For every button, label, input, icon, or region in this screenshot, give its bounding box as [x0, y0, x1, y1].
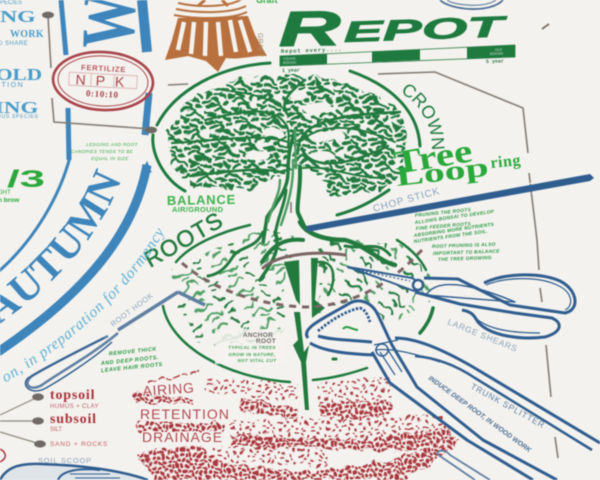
soil items with pins: subsoil	[50, 412, 97, 427]
soil items with pins: HUMUS + CLAY	[50, 404, 99, 410]
anchor root note	[215, 329, 287, 364]
root pruning note	[412, 207, 500, 263]
root pruning note: NUTRIENTS FROM THE SOIL.	[413, 229, 488, 245]
soil items with pins: SILT	[50, 427, 63, 433]
root pruning note: FINE FEEDER ROOTS	[416, 221, 472, 232]
tree: branches and trunk	[172, 80, 400, 243]
repot bar: young to old bonsai: Repot every....	[281, 46, 343, 55]
canopy note: EQUAL IN SIZE	[91, 156, 129, 161]
large shears	[348, 267, 575, 354]
root pruning note: IMPORTANT TO BALANCE	[433, 249, 500, 257]
balance label: BALANCE	[167, 192, 236, 208]
roots ring	[163, 225, 433, 382]
root pruning note: ALLOWS BONSAI TO DEVELOP	[413, 209, 495, 226]
crown ring	[153, 63, 420, 215]
label: crown: CROWN	[402, 84, 446, 150]
canopy note: LEDGING AND ROOT	[86, 142, 139, 147]
autumn subtitle: on, in preparation for dormancy	[3, 228, 165, 382]
soil function labels: RETENTION	[140, 406, 230, 422]
fertilize NPK seal: FERTILIZE	[81, 63, 126, 74]
green detail between tools	[343, 327, 358, 330]
left column: blue labels: WORK	[10, 29, 44, 40]
soil speckle bands	[133, 372, 460, 480]
soil function labels	[140, 379, 230, 445]
anchor root note: GROW IN NATURE,	[228, 352, 276, 357]
tree loop ring title: ring	[490, 152, 522, 172]
green ratio note	[0, 165, 45, 204]
anchor root note: TYPICAL IN TREES	[228, 345, 276, 350]
fertilize NPK seal	[52, 49, 154, 113]
repot bar: young to old bonsai: YOUNG	[283, 57, 296, 61]
anchor root note: ANCHOR	[243, 332, 273, 339]
soil scoop	[0, 456, 148, 480]
large shears: LARGE SHEARS	[446, 317, 519, 354]
pruning line: dashed cut	[182, 250, 422, 307]
repot bar: young to old bonsai: OLD	[495, 48, 503, 52]
tree: foliage	[167, 73, 407, 197]
anchor root note: NOT VITAL CUT	[237, 358, 277, 363]
hook note: AND DEEP ROOTS.	[100, 355, 159, 367]
repot logo: EPOT	[343, 10, 508, 48]
chop stick: CHOP STICK	[372, 186, 441, 215]
hook note	[100, 346, 163, 374]
root hook tool	[25, 291, 205, 391]
repot logo: R	[278, 1, 341, 57]
root hook tool: ROOT HOOK	[109, 291, 155, 329]
broom: grafted root bundle	[165, 0, 278, 72]
gray leader pins	[42, 12, 558, 458]
soil function labels: AIRING	[142, 379, 195, 399]
repot logo	[278, 1, 508, 57]
trunk splitter	[306, 301, 600, 480]
tree loop ring title	[391, 133, 522, 192]
root pruning note: ROOT PRUNING IS ALSO	[432, 242, 496, 250]
left column: blue labels	[0, 0, 44, 120]
root pruning note: THE TREE GROWING	[438, 255, 492, 263]
top stamp fragment	[440, 0, 503, 9]
green ratio note: /3	[7, 165, 45, 192]
trunk splitter: INDUCE DEEP ROOT, IN WOOD WORK	[427, 375, 533, 455]
fertilize NPK seal: 0:10:10	[86, 88, 119, 100]
label: roots: ROOTS	[140, 206, 228, 272]
canopy note: CANOPIES TENDS TO BE	[71, 149, 134, 154]
repot bar: young to old bonsai: BONSAI	[283, 61, 296, 65]
soil function labels: DRAINAGE	[142, 429, 223, 445]
autumn band	[0, 157, 151, 352]
fertilize NPK seal: NPK	[75, 71, 135, 90]
root mass texture	[172, 228, 432, 345]
chop stick	[306, 174, 594, 232]
tree loop ring title: Loop	[394, 152, 490, 192]
roots: taproot and wedges	[284, 258, 325, 410]
tree loop ring title: Tree	[391, 133, 475, 182]
repot bar: young to old bonsai: 5 year	[486, 58, 504, 65]
root pruning note: ABSORBING MORE NUTRIENTS	[412, 222, 495, 239]
repot bar: young to old bonsai: BONSAI	[490, 52, 503, 56]
soil items with pins: SAND + ROCKS	[50, 441, 108, 448]
canopy note	[71, 142, 139, 161]
bottom right tool handle	[437, 451, 490, 480]
left column: blue labels: NG	[0, 8, 36, 26]
root pruning note: PRUNING THE ROOTS	[415, 207, 472, 219]
soil items with pins	[0, 388, 108, 462]
trunk splitter: TRUNK SPLITTER	[469, 381, 547, 430]
smudge mark	[542, 24, 549, 29]
hook note: REMOVE THICK	[109, 346, 158, 358]
repot bar: young to old bonsai: 1 year	[282, 67, 300, 74]
balance label: AIR/GROUND	[172, 205, 224, 214]
winter band: blue stripes and title	[61, 0, 153, 160]
hook note: LEAVE HAIR ROOTS	[101, 362, 163, 374]
anchor root note: ROOT	[256, 338, 276, 345]
soil items with pins: topsoil	[50, 388, 95, 403]
repot bar: young to old bonsai	[280, 45, 515, 74]
broom: grafted root bundle: GRAFT	[256, 33, 263, 57]
roots: main roots	[208, 222, 395, 359]
soil scoop: SOIL SCOOP	[38, 456, 92, 465]
